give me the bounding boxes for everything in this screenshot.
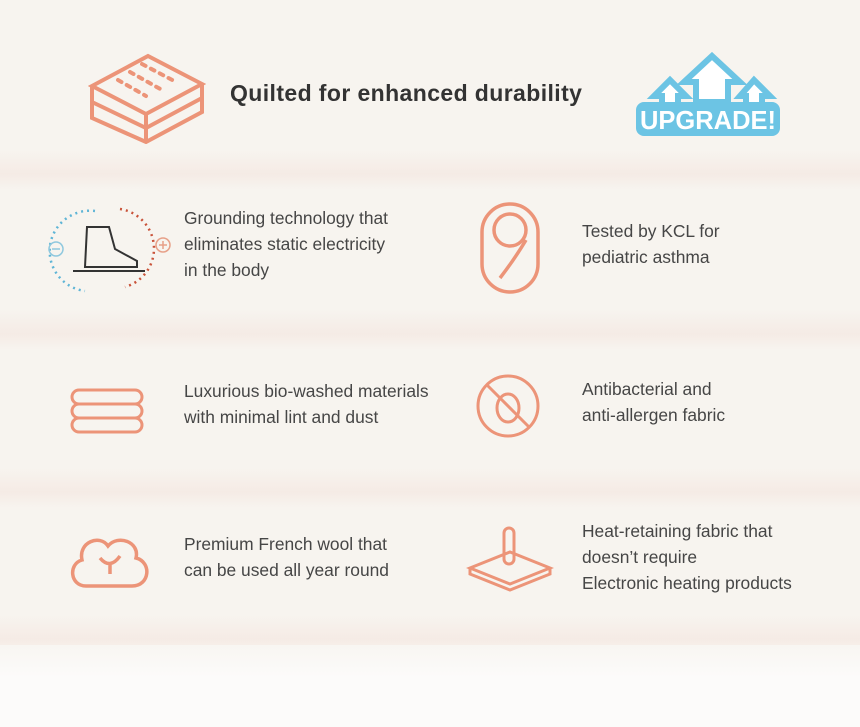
text: KCL: pediatric asthma <box>582 247 710 267</box>
icon: grounding foot <box>48 208 171 292</box>
text: bio-washed <box>184 381 429 427</box>
badge: upgrade: UPGRADE! <box>640 105 776 135</box>
text: grounding <box>184 208 388 280</box>
icon: no bug <box>476 374 540 438</box>
badge: upgrade <box>636 52 780 136</box>
text: antibacterial <box>582 379 725 425</box>
icon: towels <box>70 388 144 434</box>
text: heat: Electronic heating products <box>582 573 792 593</box>
icon: cotton <box>70 538 149 588</box>
text: wool: Premium French wool that <box>184 534 387 554</box>
text: heat: Heat-retaining fabric that <box>582 521 772 541</box>
text: bio-washed: with minimal lint and dust <box>184 407 378 427</box>
text: wool: can be used all year round <box>184 560 389 580</box>
icon: mattress <box>88 54 206 144</box>
text: KCL <box>582 221 720 267</box>
title: Quilted for enhanced durability <box>230 80 582 106</box>
icon: baby <box>480 202 540 294</box>
text: bio-washed: Luxurious bio-washed materials <box>184 381 429 401</box>
text: antibacterial: Antibacterial and <box>582 379 712 399</box>
text: antibacterial: anti-allergen fabric <box>582 405 725 425</box>
text: heat: doesn’t require <box>582 547 697 567</box>
text: grounding: in the body <box>184 260 269 280</box>
text: heat <box>582 521 792 593</box>
text: wool <box>184 534 389 580</box>
icon: heat mat <box>466 526 554 592</box>
text: KCL: Tested by KCL for <box>582 221 720 241</box>
text: grounding: Grounding technology that <box>184 208 388 228</box>
text: grounding: eliminates static electricity <box>184 234 385 254</box>
